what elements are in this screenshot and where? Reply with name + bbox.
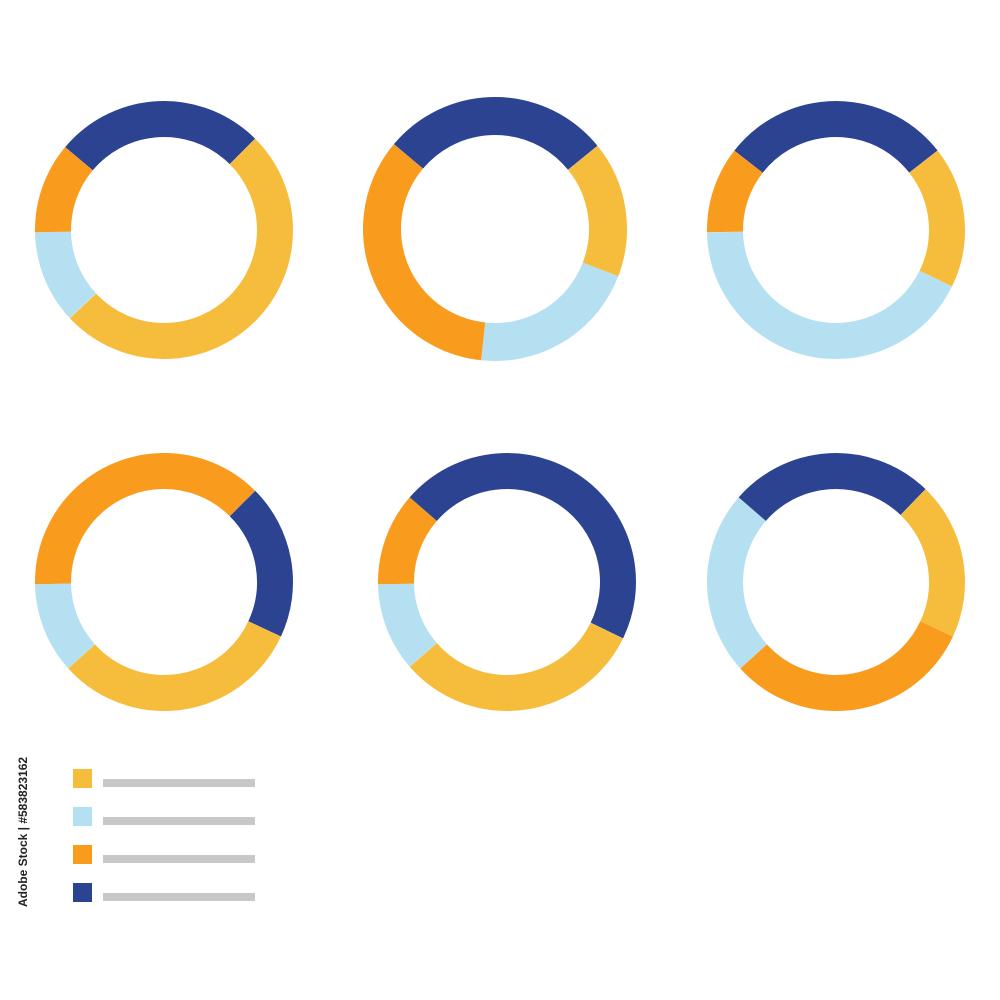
legend: [73, 769, 255, 902]
watermark id text: Adobe Stock | #583823162: [16, 757, 30, 907]
donut chart 6: [679, 425, 993, 739]
donut chart 4: [7, 425, 321, 739]
donut chart 2: [336, 70, 654, 388]
donut chart 3: [680, 74, 992, 386]
donut chart 5: [350, 425, 664, 739]
donut chart 1: [7, 73, 321, 387]
